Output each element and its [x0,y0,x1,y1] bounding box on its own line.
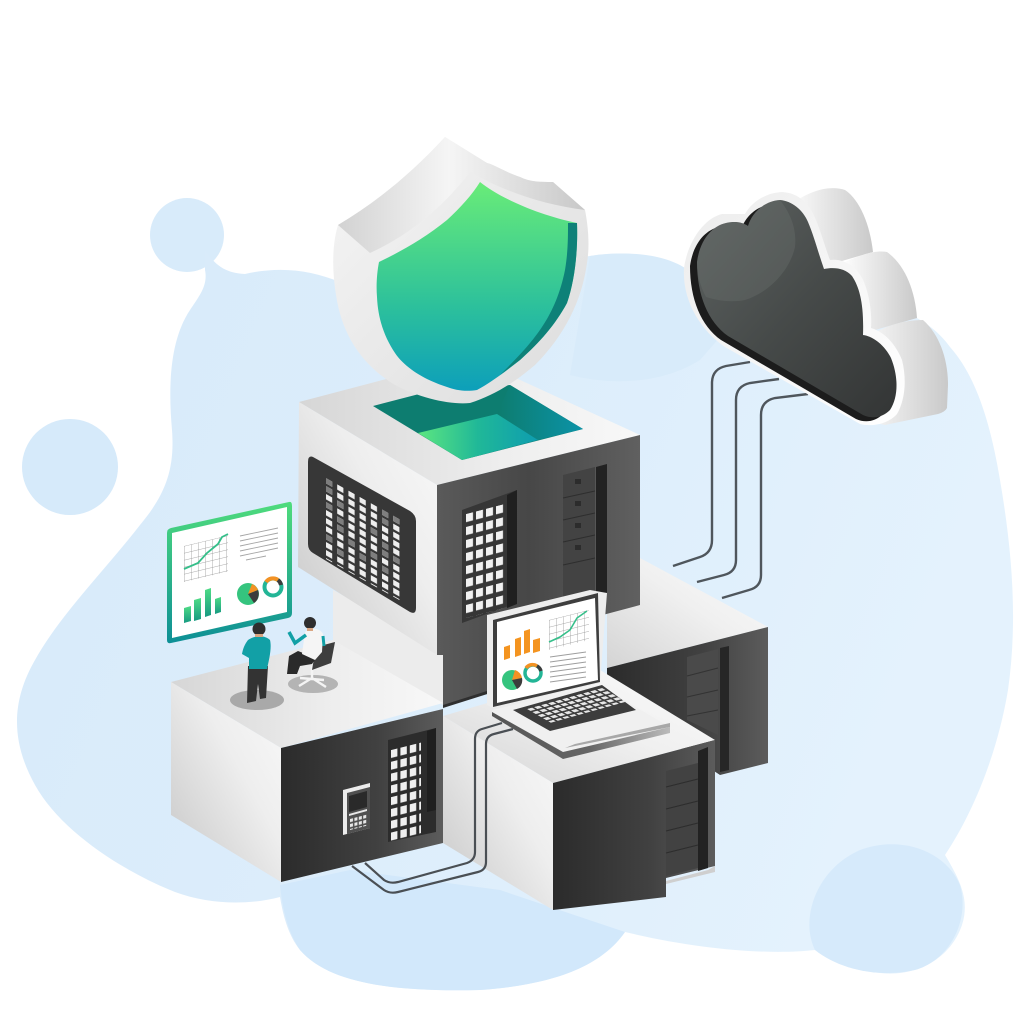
text lines [240,528,278,560]
cloud dark back edge [690,204,890,421]
keypad panel [343,783,370,835]
security shield [333,137,588,403]
pie chart [237,583,259,605]
server box: back right [607,558,768,775]
bar chart [184,588,221,623]
cloud [684,188,948,425]
person standing [230,622,284,710]
grid panel bottom left [388,728,436,843]
wall monitor dashboard [167,502,292,643]
left vent panel [308,457,416,613]
cloud face [697,200,897,417]
rack drawers front right [666,763,698,876]
laptop base [492,685,670,758]
cloud wires [673,362,808,598]
cloud rim [684,192,905,425]
person seated on chair [287,617,338,693]
laptop text lines [550,652,586,682]
shield green face [377,182,577,391]
shield dark edge [500,223,577,375]
right vent grid [462,490,517,623]
shield socket in cube top [373,385,583,460]
background: blue blob [17,198,1013,990]
laptop donut chart [525,665,541,681]
laptop screen [487,590,607,708]
server box: front right [443,670,715,910]
cloud highlight [697,200,795,301]
donut chart [264,578,282,596]
server box: bottom left [171,640,443,882]
pillar under top cube [333,590,500,708]
rack drawers top cube [563,467,595,600]
rack drawers back right [687,649,718,735]
cloud extruded lobes [790,188,873,265]
laptop pie chart [502,670,522,690]
shield top rim [338,137,585,253]
laptop line chart [549,610,589,650]
laptop keyboard [513,685,636,731]
cables to laptop [352,723,513,893]
laptop bar chart [504,629,540,660]
laptop [487,590,670,759]
line chart [184,534,228,582]
top server cube [298,357,640,705]
